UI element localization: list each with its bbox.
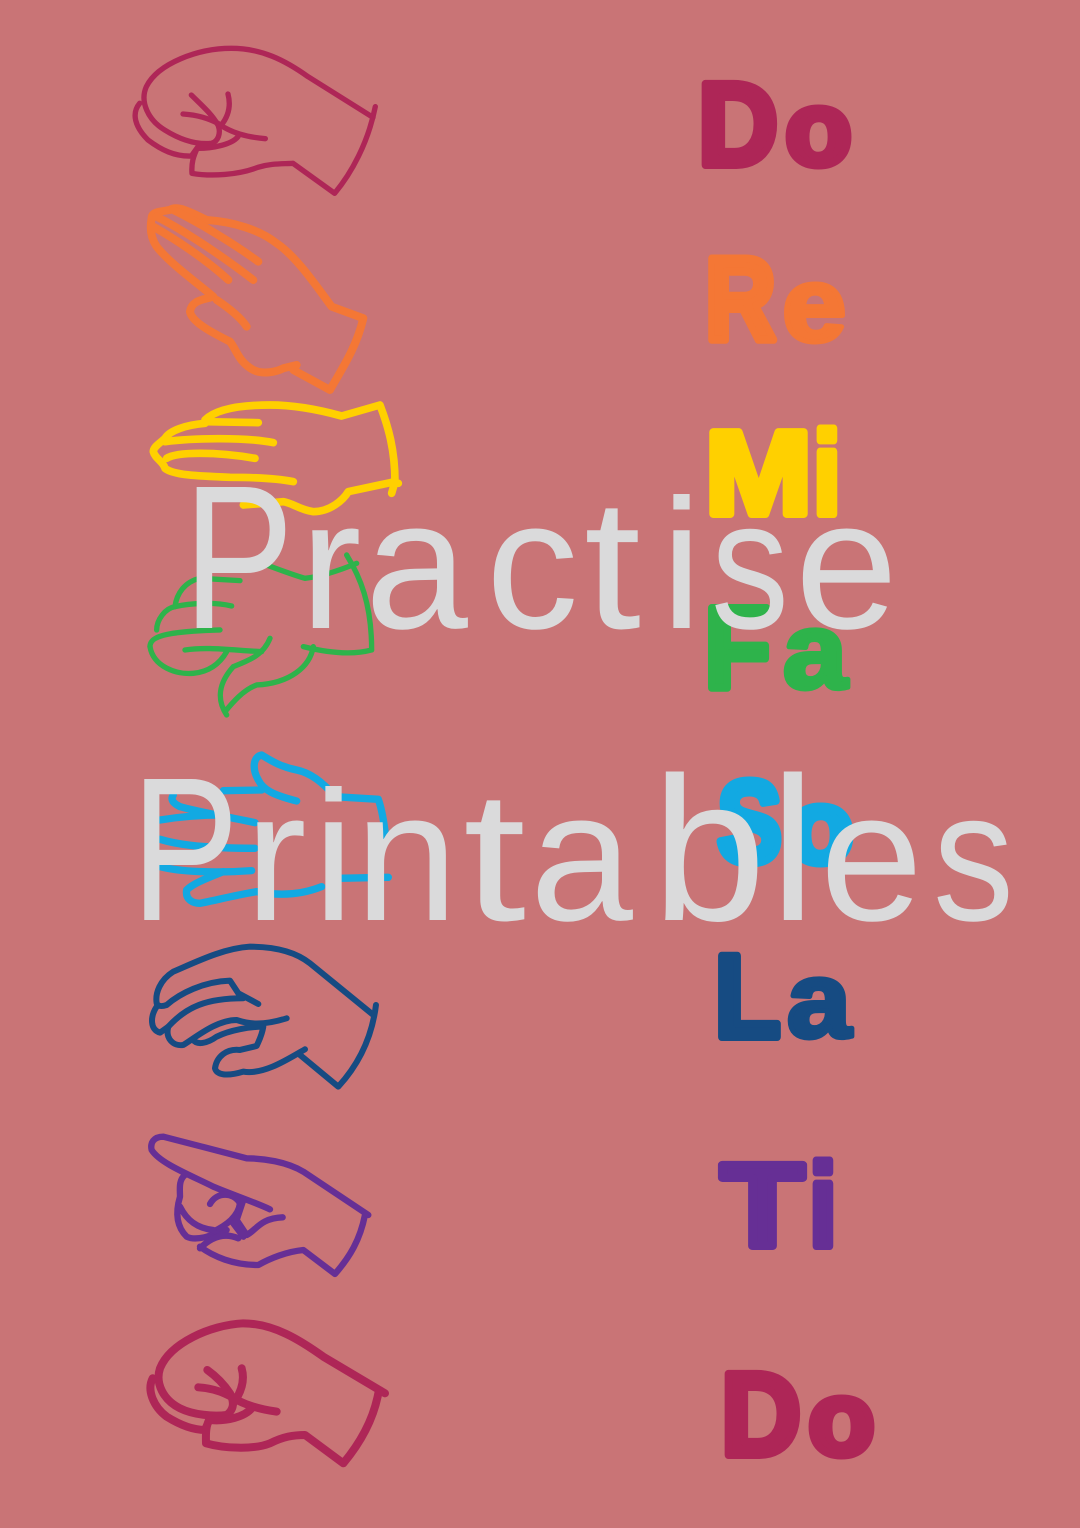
label: La — [714, 931, 852, 1063]
title: Practise Printables: r — [300, 462, 362, 668]
title: Practise Printables: e — [820, 754, 923, 960]
label: Fa: a — [783, 590, 848, 711]
label: Re: R — [705, 234, 776, 366]
icon: flat hand angled up (Re) — [151, 208, 363, 390]
title: Practise Printables: b — [652, 735, 766, 964]
label: Ti: i — [809, 1140, 837, 1272]
label: Mi: M — [705, 407, 812, 540]
label: Ti — [721, 1140, 837, 1272]
title: Practise Printables: a — [530, 754, 633, 960]
label: Mi: i — [813, 408, 841, 540]
label: high Do: D — [721, 1349, 801, 1481]
icon: closed fist hand (high Do) — [150, 1323, 385, 1463]
title: Practise Printables: a — [365, 462, 468, 668]
title: Practise Printables: s — [711, 462, 789, 668]
title: Practise Printables: s — [933, 754, 1014, 960]
label: La: a — [787, 939, 852, 1060]
label: Fa — [704, 583, 848, 713]
label: So: S — [717, 756, 782, 888]
icon: relaxed curved hand (La) — [152, 947, 376, 1087]
label: Do — [698, 59, 852, 191]
label: Do: o — [786, 72, 852, 188]
title: Practise Printables — [131, 443, 1014, 964]
title: Practise Printables: l — [770, 735, 816, 964]
label: high Do — [721, 1349, 874, 1481]
label: Re — [705, 234, 846, 366]
icon: pointing index finger hand (Ti) — [151, 1137, 368, 1274]
icon: thumb down hand (Fa) — [150, 555, 372, 715]
title: Practise Printables: c — [486, 462, 578, 668]
title: Practise Printables: P — [131, 735, 239, 964]
label: high Do: o — [808, 1362, 874, 1478]
title: Practise Printables: e — [795, 462, 898, 668]
label: Ti: T — [721, 1140, 804, 1272]
title: Practise Printables: r — [245, 754, 307, 960]
title: Practise Printables: P — [183, 443, 294, 672]
label: So: o — [788, 770, 854, 886]
title: Practise Printables: t — [584, 462, 641, 668]
label: La: L — [714, 931, 780, 1063]
label: Fa: F — [704, 583, 770, 713]
label: Do: D — [698, 59, 778, 191]
icon: closed fist hand (Do) — [135, 48, 375, 193]
icon: flat horizontal hand (Mi) — [153, 405, 398, 512]
title: Practise Printables: n — [355, 754, 458, 960]
title: Practise Printables: i — [313, 754, 354, 960]
label: So — [717, 756, 854, 888]
label: Re: e — [782, 246, 846, 364]
icon: open hand with raised thumb (So) — [160, 755, 388, 903]
title: Practise Printables: t — [463, 754, 526, 960]
title: Practise Printables: i — [661, 462, 702, 668]
